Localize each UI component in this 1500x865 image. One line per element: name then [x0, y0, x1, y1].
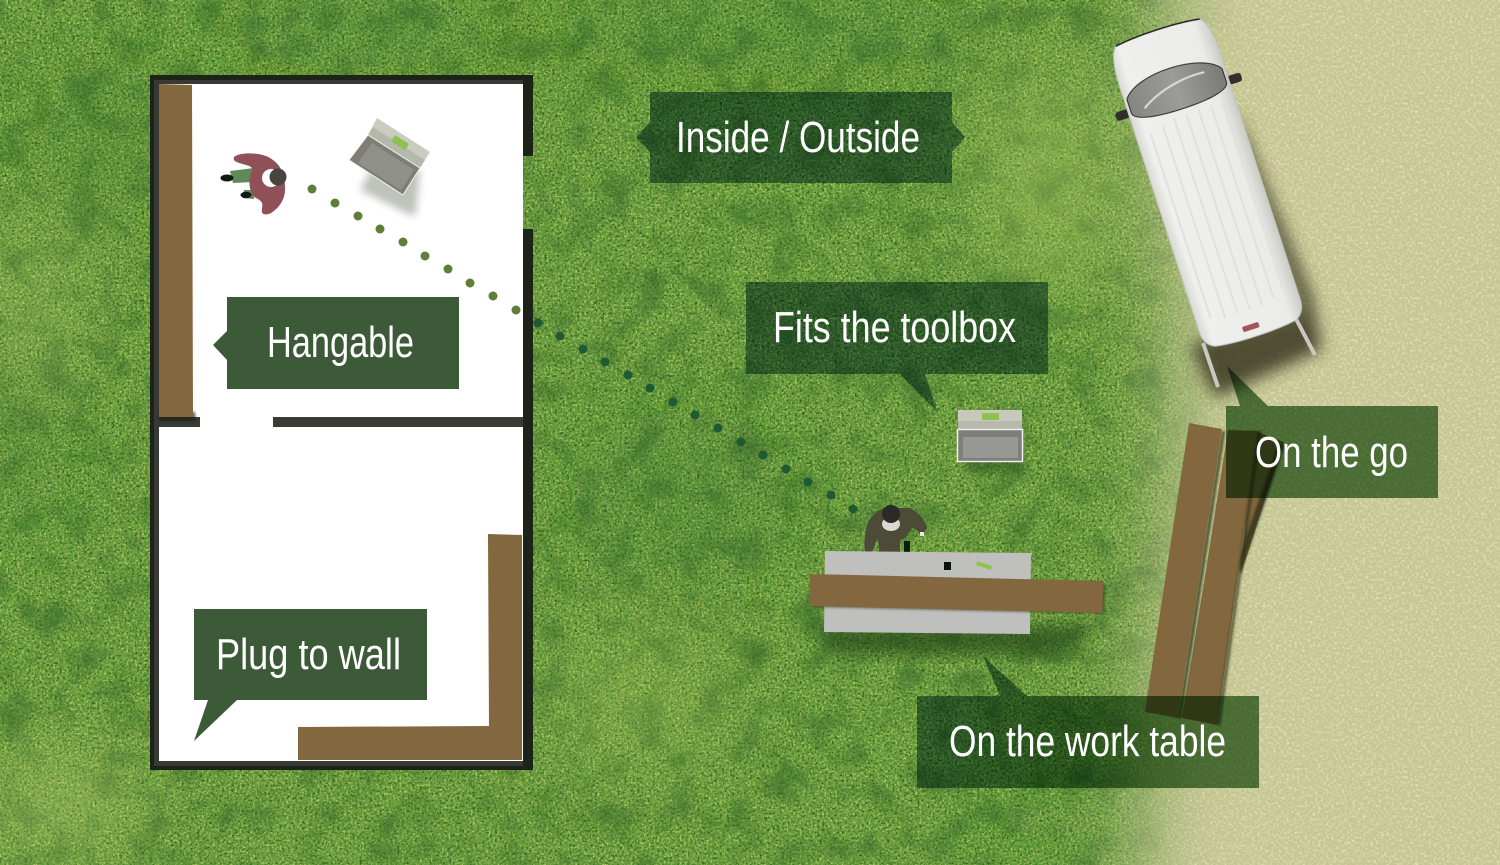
dotted path: inside	[308, 184, 520, 314]
floor plan of the building	[150, 75, 533, 770]
van shadow	[1190, 110, 1322, 398]
callout: Plug to wall	[194, 609, 427, 741]
dotted path: outside	[534, 318, 858, 514]
callout: Hangable: Hangable	[267, 318, 414, 367]
callout: On the work table: On the work table	[949, 717, 1226, 766]
L-shaped workbench	[298, 534, 522, 760]
person at work table	[864, 505, 927, 552]
van	[1094, 9, 1322, 398]
callout: Hangable	[213, 297, 459, 389]
callout: Inside / Outside: Inside / Outside	[676, 113, 920, 162]
callout: Fits the toolbox	[746, 282, 1048, 413]
callout: Inside / Outside	[636, 92, 965, 183]
callout: On the go	[1226, 366, 1438, 498]
person in red jacket	[220, 153, 286, 214]
ramps	[1203, 317, 1315, 387]
toolbox on the grass	[958, 410, 1023, 473]
toolbox in building	[349, 118, 430, 215]
callout: On the go: On the go	[1255, 428, 1408, 477]
callout: On the work table	[917, 656, 1259, 788]
work table with board	[809, 551, 1106, 655]
callout: Plug to wall: Plug to wall	[216, 630, 401, 679]
shelf along left wall	[159, 84, 196, 421]
stacked boards beside van	[1145, 423, 1285, 726]
callout: Fits the toolbox: Fits the toolbox	[773, 303, 1016, 352]
walls	[150, 75, 533, 770]
van body	[1094, 9, 1319, 356]
tail light	[1242, 322, 1260, 332]
